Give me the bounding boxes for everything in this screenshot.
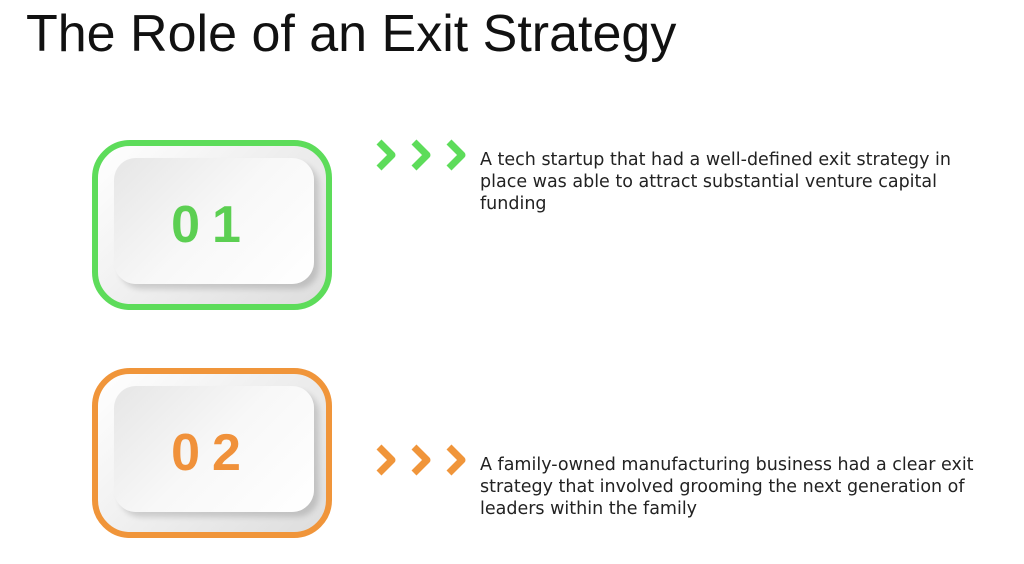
- arrows 01: [376, 140, 466, 170]
- arrows 02: [376, 444, 466, 476]
- text 01: A tech startup that had a well-defined exit strategy in place was able to attract substantial venture capital funding: [480, 150, 951, 214]
- title: The Role of an Exit Strategy: [26, 5, 676, 63]
- box 02: [92, 368, 332, 538]
- box 01: [92, 140, 332, 310]
- text 02: A family-owned manufacturing business had a clear exit strategy that involved grooming the next generation of leaders within the family: [480, 455, 974, 519]
- box 01: 01: [171, 196, 253, 254]
- box 02: 02: [171, 424, 253, 482]
